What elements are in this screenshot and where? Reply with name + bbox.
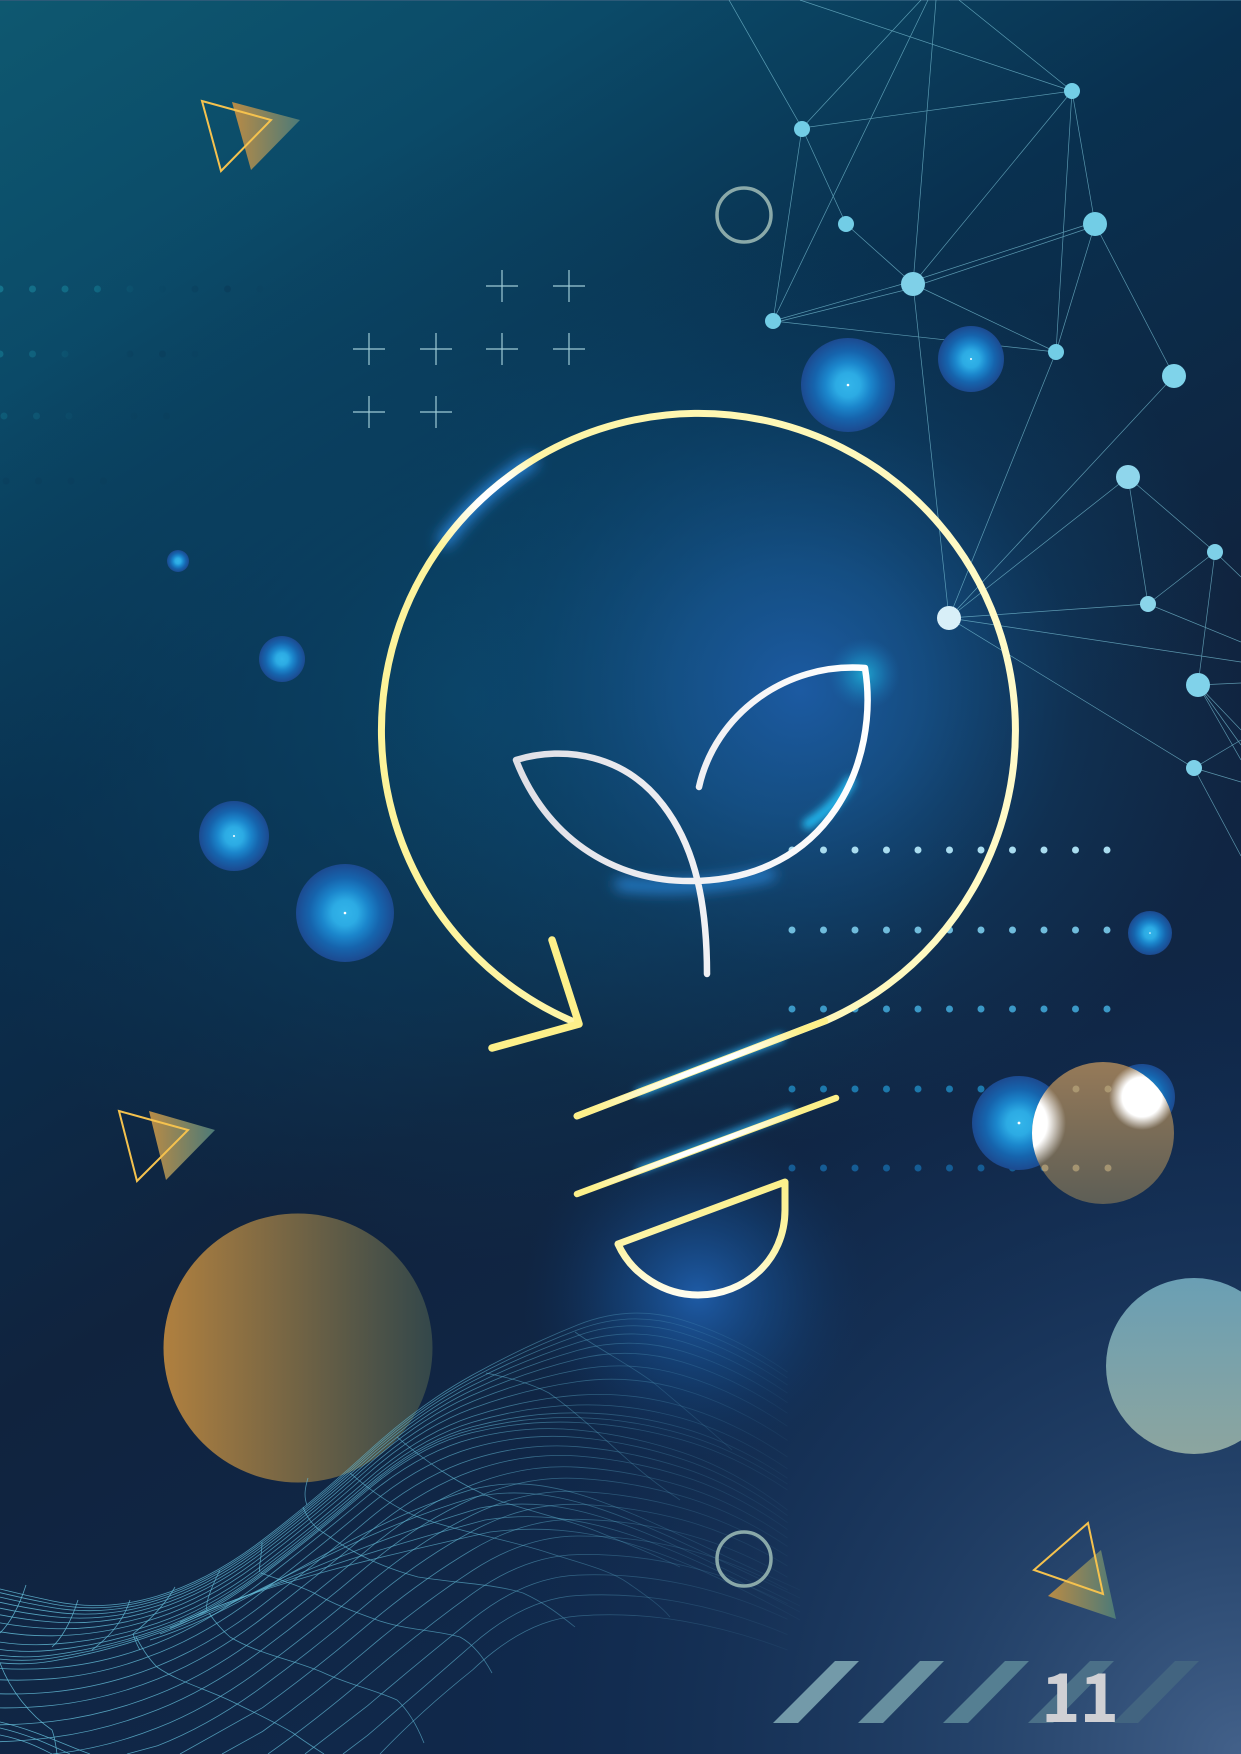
ring: bottom bbox=[717, 1532, 771, 1586]
network constellation lines bbox=[729, 0, 1241, 856]
ring: top bbox=[717, 188, 771, 242]
sprout with two leaves bbox=[516, 668, 868, 974]
faint dotted rows at left bbox=[0, 289, 270, 481]
glowing blue orbs bbox=[167, 326, 1175, 1170]
dotted rows at right bbox=[792, 850, 1110, 1168]
triangle: bottom right bbox=[1034, 1523, 1116, 1619]
pale sphere at right edge bbox=[1106, 1278, 1241, 1454]
wireframe wave mesh bbox=[0, 1313, 800, 1754]
bulb base cap bbox=[618, 1182, 785, 1295]
glow accents behind the bulb bbox=[445, 462, 900, 1169]
triangle: top left bbox=[202, 101, 300, 171]
page number: 11 bbox=[1041, 1645, 1118, 1742]
plus sign grid bbox=[353, 270, 585, 428]
diagonal stripes bbox=[773, 1661, 1199, 1723]
central network node bbox=[937, 606, 961, 630]
translucent brown sphere with white overlaps bbox=[1032, 1062, 1174, 1204]
large brown sphere bbox=[164, 1214, 432, 1482]
light bulb outline with arrow bbox=[381, 413, 1015, 1116]
network nodes bbox=[765, 83, 1223, 776]
triangle: middle left bbox=[119, 1111, 215, 1181]
bulb base line bbox=[577, 1098, 836, 1194]
